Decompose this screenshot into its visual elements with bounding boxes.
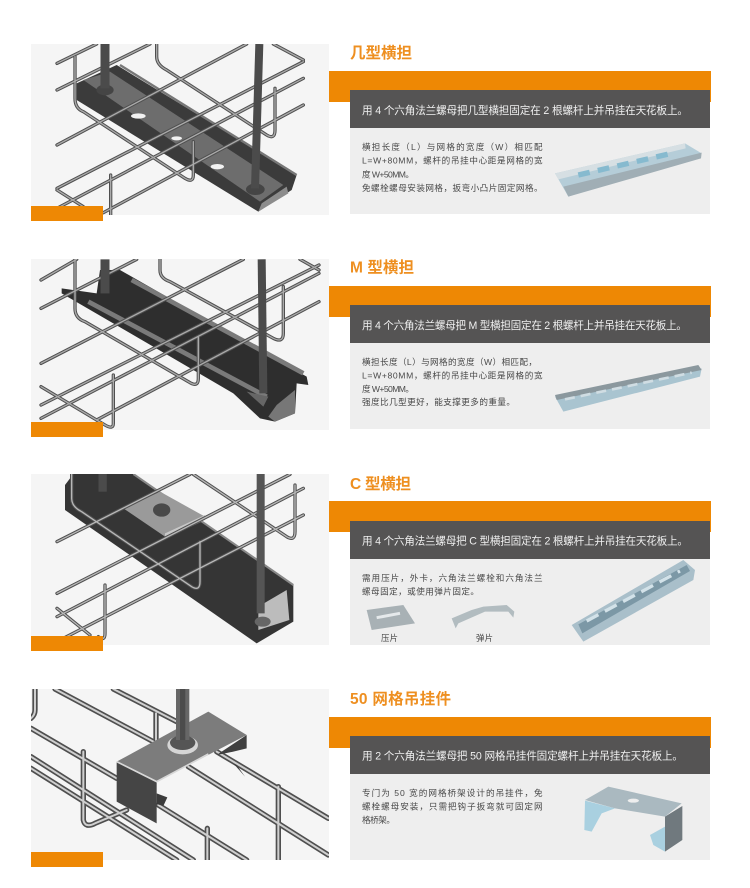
details box: 压片 (381, 633, 398, 643)
orange tab: photo (31, 422, 103, 437)
heading: M 型横担 (350, 258, 414, 276)
orange bar (329, 717, 711, 748)
details box: 专门为 50 宽的网格桥架设计的吊挂件，免 (362, 787, 543, 798)
details box: 横担长度（L）与网格的宽度（W）相匹配， (362, 356, 537, 367)
details box: 格桥架。 (362, 814, 395, 825)
details box: 度 W+50MM。 (362, 383, 414, 394)
panel: 几型横担 (31, 43, 711, 221)
details box: L=W+80MM，螺杆的吊挂中心距是网格的宽 (362, 370, 543, 380)
panel: C 型横担 (31, 474, 711, 651)
summary bar: 用 4 个六角法兰螺母把 C 型横担固定在 2 根螺杆上并吊挂在天花板上。 (362, 534, 688, 548)
details box: 螺母固定，或使用弹片固定。 (362, 586, 479, 596)
orange tab: photo (31, 636, 103, 651)
details box: 横担长度（L）与网格的宽度（W）相匹配 (362, 141, 543, 152)
product: 几型横担 (555, 143, 702, 197)
summary bar: 用 4 个六角法兰螺母把几型横担固定在 2 根螺杆上并吊挂在天花板上。 (362, 104, 688, 117)
heading: C 型横担 (350, 474, 411, 493)
products: C 型横担, 压片, 弹片 (366, 560, 695, 642)
details box: 免螺栓螺母安装网格，扳弯小凸片固定网格。 (362, 182, 543, 193)
details box: 螺栓螺母安装，只需把钩子扳弯就可固定网 (362, 800, 543, 812)
details box: 弹片 (476, 633, 493, 643)
product: M 型横担 (555, 365, 702, 412)
summary bar: 用 2 个六角法兰螺母把 50 网格吊挂件固定螺杆上并吊挂在天花板上。 (362, 750, 683, 762)
panel: 50 网格吊挂件 (31, 689, 711, 867)
panel: M 型横担 (31, 258, 711, 437)
details box: 强度比几型更好，能支撑更多的重量。 (362, 396, 515, 407)
summary bar (350, 736, 710, 774)
details box: 度 W+50MM。 (362, 168, 414, 180)
photo: 几型横担 installation (31, 44, 329, 215)
product: 50 网格吊挂件 (584, 786, 682, 852)
details box: L=W+80MM，螺杆的吊挂中心距是网格的宽 (362, 154, 543, 166)
summary bar (350, 305, 710, 343)
orange bar (329, 286, 711, 317)
orange bar (329, 501, 711, 532)
orange tab: photo (31, 206, 103, 221)
summary bar (350, 521, 710, 559)
summary bar: 用 4 个六角法兰螺母把 M 型横担固定在 2 根螺杆上并吊挂在天花板上。 (362, 319, 687, 332)
photo: C 型横担 installation (31, 474, 329, 645)
orange tab: photo (31, 852, 103, 867)
heading: 几型横担 (350, 43, 412, 62)
details box (350, 559, 710, 645)
details box (350, 343, 710, 429)
summary bar (350, 90, 710, 128)
orange bar (329, 71, 711, 102)
details box (350, 774, 710, 860)
photo: M 型横担 installation (31, 259, 329, 430)
heading: 50 网格吊挂件 (350, 689, 451, 708)
details box: 需用压片，外卡，六角法兰螺栓和六角法兰 (362, 572, 543, 583)
details box (350, 128, 710, 214)
photo: 50 网格吊挂件 installation (31, 689, 329, 860)
